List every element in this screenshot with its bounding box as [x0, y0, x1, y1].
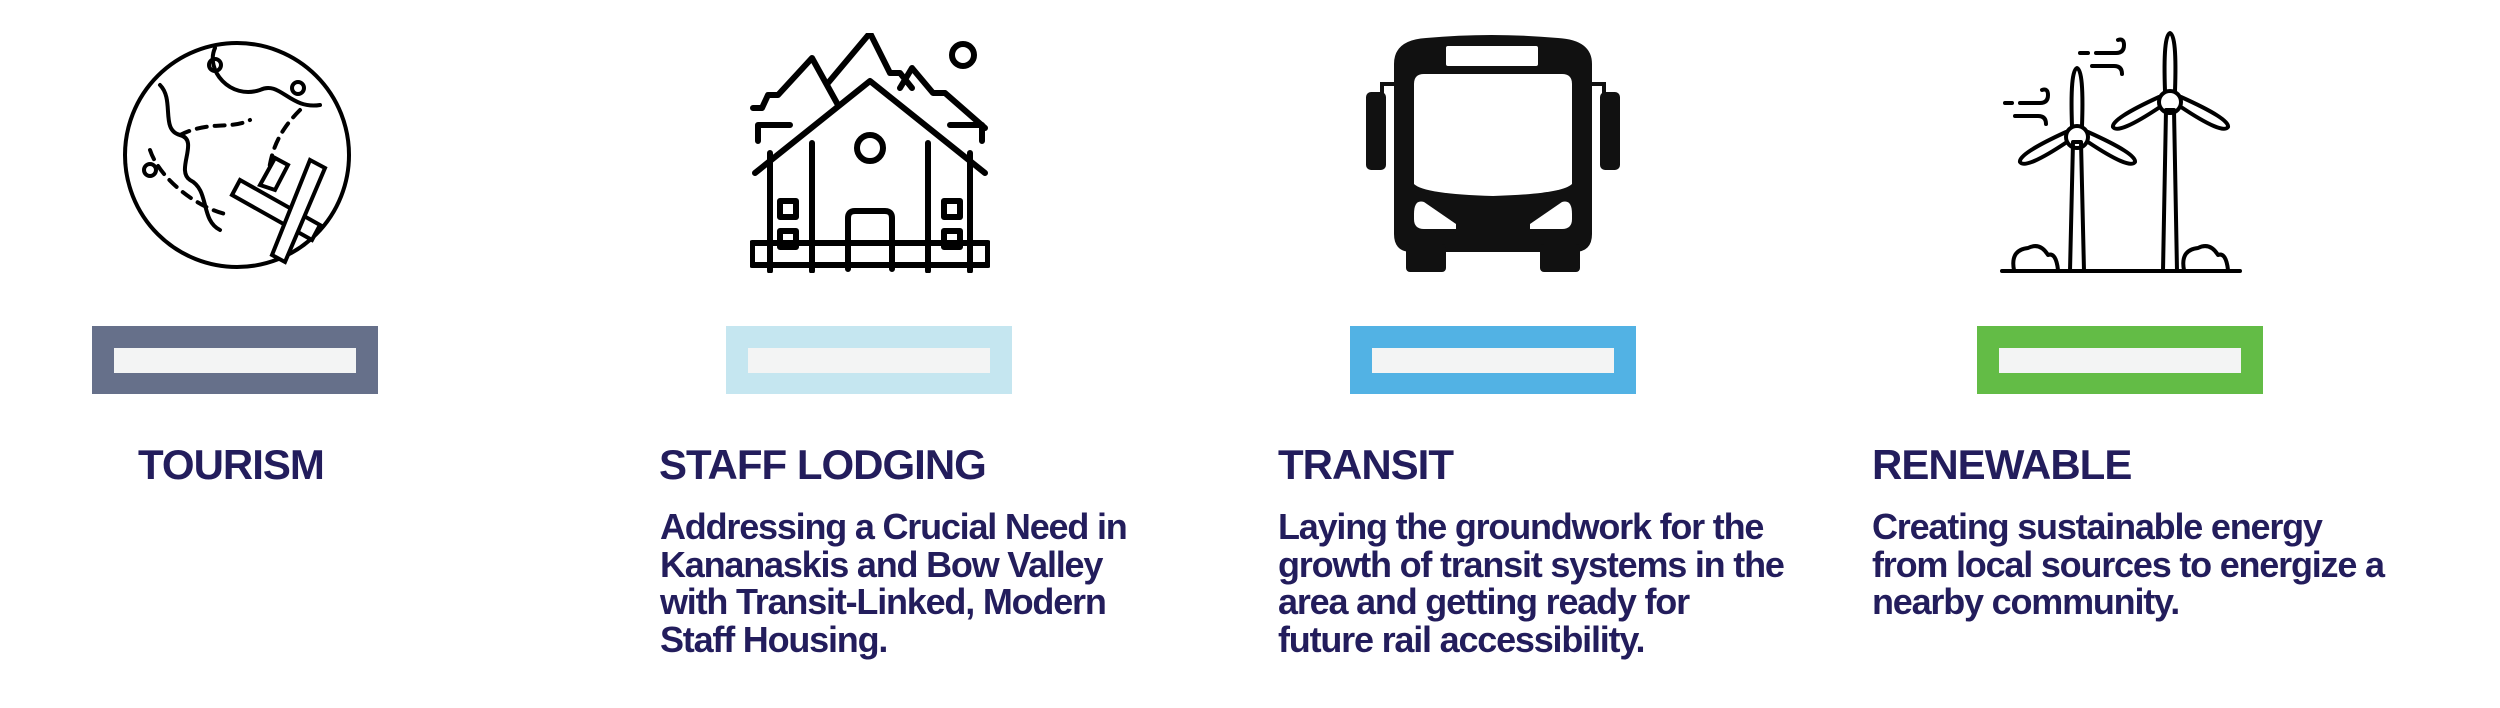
text: transit: [1278, 506, 1784, 660]
text: renewable: [1872, 506, 2386, 622]
heading: tourism: TOURISM: [138, 441, 324, 488]
text: staff lodging: [660, 506, 1127, 660]
icon: bus: [1366, 35, 1620, 272]
bar: transit: [1350, 326, 1636, 394]
bar: renewable: [1977, 326, 2263, 394]
text: transit: growth of transit systems in the: [1278, 544, 1784, 584]
text: staff lodging: with Transit-Linked, Modern: [660, 581, 1106, 622]
text: staff lodging: Staff Housing.: [660, 618, 887, 660]
text: staff lodging: Kananaskis and Bow Valley: [660, 544, 1102, 584]
text: renewable: from local sources to energize a: [1872, 544, 2384, 584]
text: renewable: nearby community.: [1872, 581, 2179, 622]
icon: globe with plane: [123, 41, 351, 269]
icon: wind turbines: [2000, 31, 2242, 273]
text: transit: future rail accessibility.: [1278, 618, 1644, 660]
text: renewable: Creating sustainable energy: [1872, 506, 2322, 547]
text: staff lodging: Addressing a Crucial Need in: [660, 506, 1127, 547]
icon: house with mountains: [750, 33, 990, 273]
heading: renewable: RENEWABLE: [1872, 441, 2131, 488]
heading: transit: TRANSIT: [1278, 441, 1453, 488]
bar: staff lodging: [726, 326, 1012, 394]
bar: tourism: [92, 326, 378, 394]
text: transit: Laying the groundwork for the: [1278, 506, 1763, 547]
text: transit: area and getting ready for: [1278, 581, 1689, 622]
heading: staff lodging: STAFF LODGING: [659, 441, 986, 488]
